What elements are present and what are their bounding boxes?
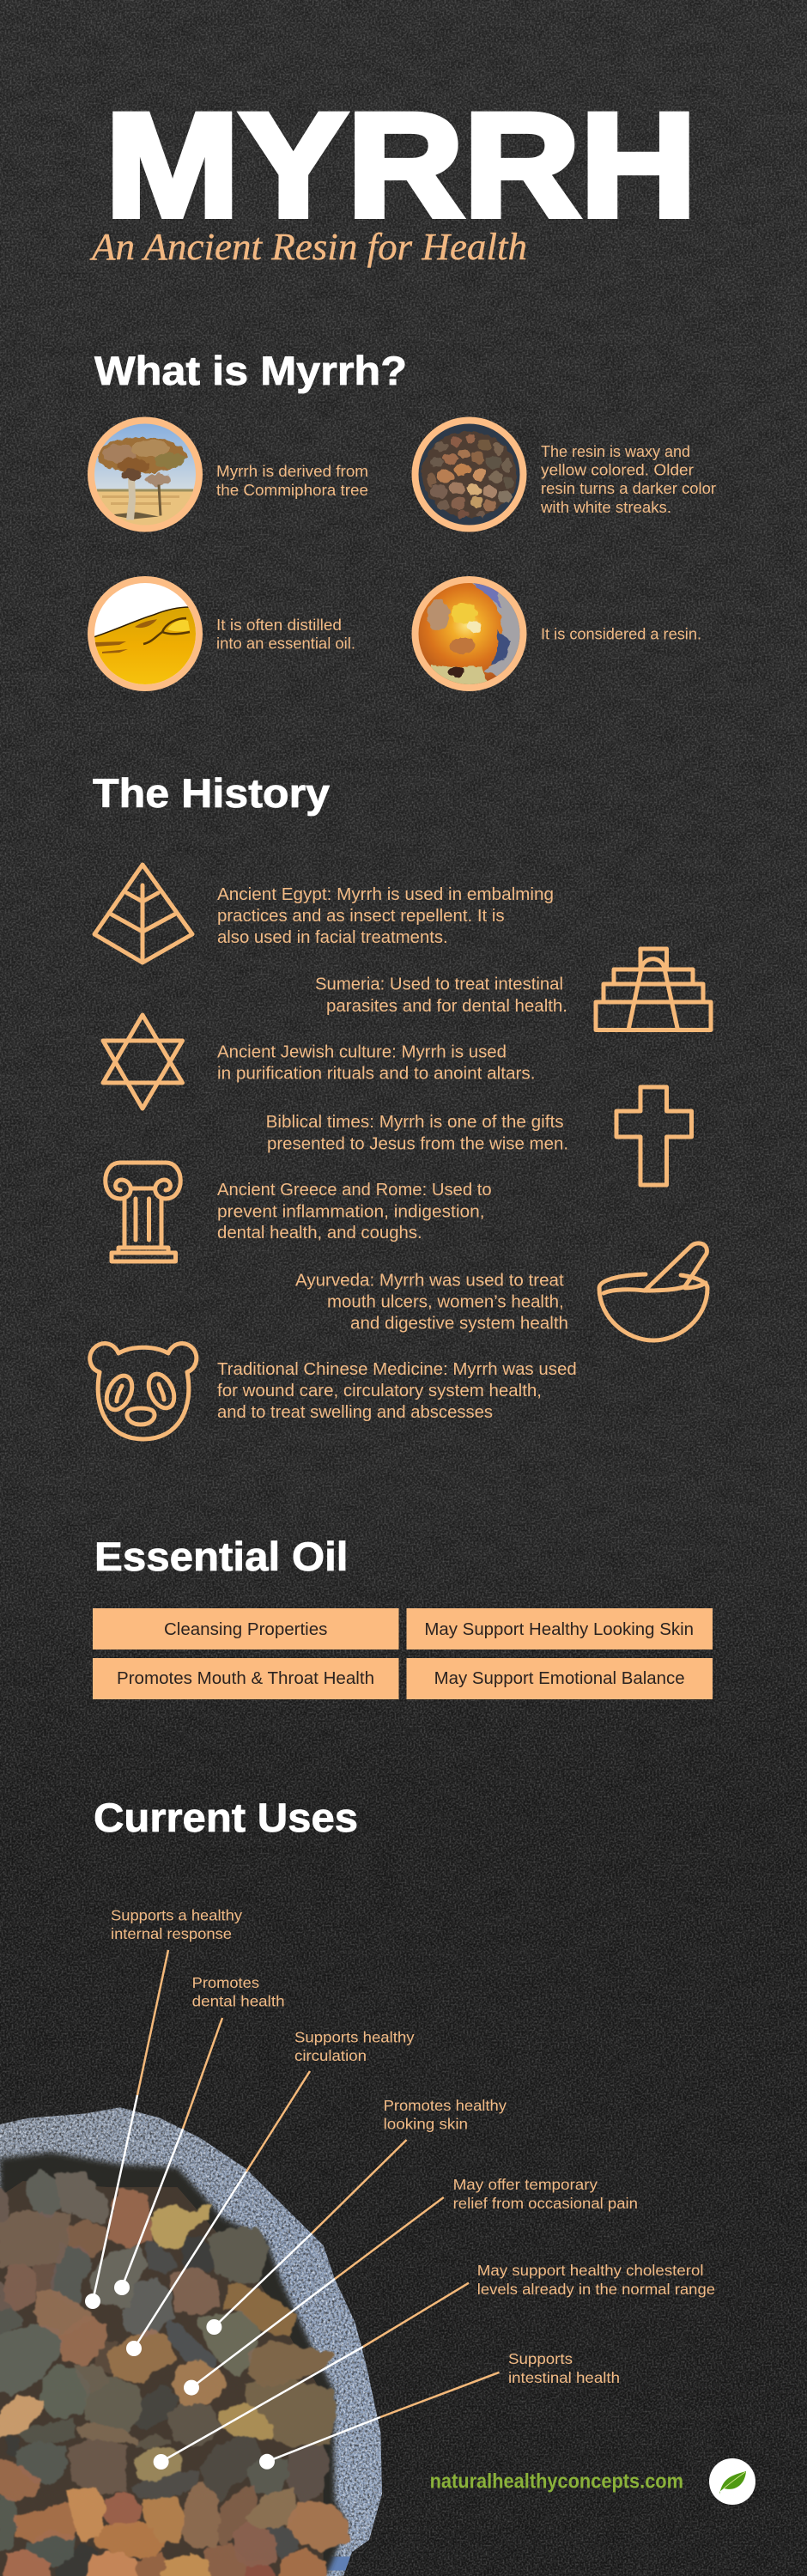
text: traditional chinese medicine: Traditional Chinese Medicine: Myrrh was used [217, 1360, 577, 1379]
text: ancient jewish culture: Ancient Jewish culture: Myrrh is used [217, 1043, 507, 1062]
icon: pyramid [94, 865, 192, 963]
heading: the history: The History [93, 770, 330, 816]
box: healthy looking skin: May Support Healthy Looking Skin [424, 1620, 694, 1639]
caption: oil [216, 617, 355, 653]
panel: the history [90, 770, 711, 1439]
callout: dental health [114, 1974, 285, 2295]
callout: circulation: Supports healthy [294, 2029, 415, 2046]
panel: current uses [0, 1795, 715, 2576]
icon: ziggurat [596, 949, 711, 1030]
text: greece and rome [217, 1181, 492, 1242]
caption: resin: resin turns a darker color [541, 480, 716, 497]
callout: internal response [85, 1907, 242, 2309]
text: ayurveda [295, 1271, 568, 1333]
text: ancient egypt [217, 885, 554, 947]
photo: commiphora tree [88, 417, 203, 532]
photo: resin pile [412, 417, 527, 532]
text: traditional chinese medicine: for wound care, circulatory system health, [217, 1382, 542, 1400]
caption: resin [540, 443, 716, 516]
box: cleansing properties [93, 1608, 398, 1649]
callout: internal response: Supports a healthy [111, 1907, 242, 1924]
text: sumeria [315, 975, 567, 1016]
text: ancient egypt: also used in facial treatments. [217, 928, 448, 947]
panel: essential oil [93, 1534, 713, 1699]
heading: what is myrrh: What is Myrrh? [94, 348, 407, 393]
photo: resin close-up [412, 576, 527, 691]
text: greece and rome: prevent inflammation, indigestion, [217, 1203, 485, 1222]
caption: resin: yellow colored. Older [541, 462, 694, 479]
text: greece and rome: Ancient Greece and Rome: Used to [217, 1181, 492, 1200]
footer: website: naturalhealthyconcepts.com [430, 2470, 683, 2494]
callout: occasional pain: relief from occasional pain [453, 2195, 638, 2212]
text: biblical times: Biblical times: Myrrh is one of the gifts [266, 1113, 564, 1132]
callout: circulation: circulation [294, 2047, 367, 2064]
text: ancient egypt: Ancient Egypt: Myrrh is used in embalming [217, 885, 554, 904]
box: healthy looking skin [407, 1608, 713, 1649]
icon: cross [616, 1087, 692, 1185]
title block [89, 82, 696, 268]
box: emotional balance: May Support Emotional Balance [434, 1669, 685, 1688]
text: ayurveda: and digestive system health [350, 1314, 568, 1333]
callout: cholesterol [154, 2262, 715, 2470]
caption: resin type: It is considered a resin. [541, 626, 701, 643]
main title: MYRRH [105, 82, 697, 247]
callout: looking skin [206, 2097, 507, 2335]
icon: greek column [106, 1163, 180, 1261]
text: ancient jewish culture: in purification rituals and to anoint altars. [217, 1064, 536, 1083]
caption: tree: the Commiphora tree [216, 482, 368, 499]
photo: essential oil [88, 576, 203, 691]
callout: cholesterol: May support healthy cholesterol [477, 2262, 704, 2279]
caption: resin: with white streaks. [540, 499, 671, 516]
icon: leaf logo [709, 2458, 755, 2505]
callout: occasional pain: May offer temporary [453, 2176, 598, 2193]
icon: mortar and pestle [599, 1243, 707, 1340]
callout: internal response: internal response [111, 1925, 232, 1942]
callout: looking skin: looking skin [384, 2116, 468, 2133]
text: ayurveda: mouth ulcers, women’s health, [327, 1293, 564, 1312]
callout: occasional pain [184, 2176, 638, 2396]
box: mouth and throat health: Promotes Mouth & Throat Health [117, 1669, 374, 1688]
callout: cholesterol: levels already in the normal range [477, 2281, 715, 2298]
box: mouth and throat health [93, 1658, 398, 1699]
heading: current uses: Current Uses [94, 1795, 358, 1840]
box: cleansing properties: Cleansing Properties [164, 1620, 327, 1639]
caption: oil: It is often distilled [216, 617, 342, 634]
text: ancient jewish culture [217, 1043, 536, 1083]
text: traditional chinese medicine [217, 1360, 577, 1422]
subtitle: An Ancient Resin for Health [89, 226, 527, 268]
callout: intestinal health [259, 2350, 620, 2470]
photo: bowl of myrrh resin [0, 2095, 401, 2576]
callout: looking skin: Promotes healthy [384, 2097, 507, 2114]
callout: circulation [126, 2029, 415, 2356]
caption: tree: Myrrh is derived from [216, 463, 368, 480]
caption: oil: into an essential oil. [216, 635, 355, 653]
panel: what is myrrh [88, 348, 716, 691]
text: ayurveda: Ayurveda: Myrrh was used to treat [295, 1271, 564, 1290]
text: sumeria: parasites and for dental health. [326, 997, 567, 1016]
text: ancient egypt: practices and as insect repellent. It is [217, 907, 505, 926]
icon: star of david [103, 1015, 182, 1109]
heading: essential oil: Essential Oil [94, 1534, 349, 1579]
callout: dental health: dental health [192, 1993, 285, 2010]
caption: resin: The resin is waxy and [541, 443, 690, 460]
caption: tree [216, 463, 368, 499]
text: biblical times: presented to Jesus from the wise men. [267, 1135, 568, 1154]
text: greece and rome: dental health, and coughs. [217, 1224, 422, 1242]
callout: intestinal health: Supports [508, 2350, 573, 2367]
callout: dental health: Promotes [192, 1974, 259, 1991]
text: sumeria: Sumeria: Used to treat intestinal [315, 975, 563, 994]
callout: intestinal health: intestinal health [508, 2369, 620, 2386]
box: emotional balance [407, 1658, 713, 1699]
icon: panda [90, 1344, 197, 1439]
text: traditional chinese medicine: and to treat swelling and abscesses [217, 1403, 493, 1422]
text: biblical times [266, 1113, 568, 1154]
